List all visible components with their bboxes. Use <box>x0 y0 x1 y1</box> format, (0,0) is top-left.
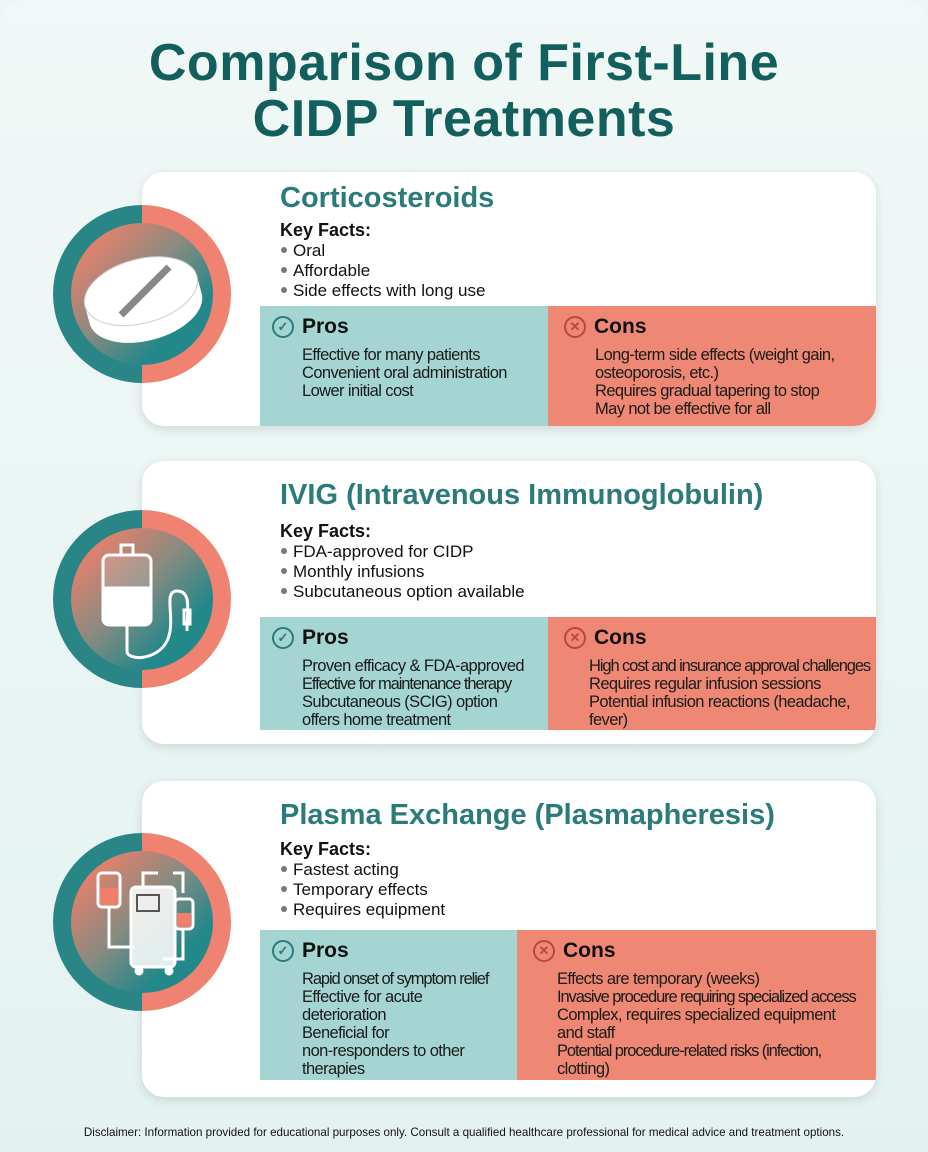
key facts: corticosteroids: Affordable <box>293 261 370 280</box>
cons: IVIG <box>548 617 876 730</box>
cons: corticosteroids <box>548 306 876 426</box>
key facts: plasma exchange: Temporary effects <box>293 880 428 899</box>
pros: IVIG <box>260 617 548 730</box>
pros: corticosteroids <box>260 306 548 426</box>
pros: IVIG: ✓ <box>278 630 288 645</box>
pros: plasma exchange: non-responders to other <box>302 1042 464 1060</box>
heading: plasma exchange: Plasma Exchange (Plasmapheresis) <box>280 799 775 831</box>
pros: corticosteroids: Pros <box>302 315 349 338</box>
pros: corticosteroids: ✓ <box>278 319 288 334</box>
cons: IVIG: fever) <box>589 711 628 729</box>
key facts: corticosteroids: Key Facts: <box>280 220 371 240</box>
pros: plasma exchange <box>260 930 517 1080</box>
cons: IVIG: ✕ <box>570 630 580 645</box>
pros: plasma exchange: Beneficial for <box>302 1024 389 1042</box>
key facts: plasma exchange <box>280 839 445 919</box>
disclaimer: Disclaimer: Information provided for educational purposes only. Consult a qualified healthcare professional for medical advice and treatment options. <box>84 1126 844 1139</box>
key facts: corticosteroids: Oral <box>293 241 325 260</box>
pros: IVIG: Proven efficacy & FDA-approved <box>302 657 524 675</box>
cons: corticosteroids: Long-term side effects (weight gain, <box>595 346 834 364</box>
pros: plasma exchange: Pros <box>302 939 349 962</box>
cons: corticosteroids: Cons <box>594 315 646 338</box>
cons: IVIG: High cost and insurance approval challenges <box>589 657 870 675</box>
heading: corticosteroids: Corticosteroids <box>280 182 494 214</box>
cons: plasma exchange: Complex, requires specialized equipment <box>557 1006 835 1024</box>
icon: IV bag <box>53 510 231 688</box>
cons: IVIG: Cons <box>594 626 646 649</box>
heading: IVIG: IVIG (Intravenous Immunoglobulin) <box>280 479 763 511</box>
key facts: IVIG <box>280 521 525 601</box>
cons: IVIG: Potential infusion reactions (headache, <box>589 693 850 711</box>
key facts: corticosteroids <box>280 220 485 300</box>
pros: plasma exchange: Rapid onset of symptom relief <box>302 970 488 988</box>
cons: IVIG: Requires regular infusion sessions <box>589 675 821 693</box>
pros: plasma exchange: therapies <box>302 1060 364 1078</box>
cons: corticosteroids: osteoporosis, etc.) <box>595 364 718 382</box>
cons: plasma exchange <box>517 930 876 1080</box>
title: CIDP Treatments <box>253 90 675 148</box>
panel: IVIG <box>142 461 876 744</box>
pros: plasma exchange: ✓ <box>278 943 288 958</box>
pros: plasma exchange: Effective for acute <box>302 988 422 1006</box>
pros: corticosteroids: Convenient oral administration <box>302 364 507 382</box>
pros: IVIG: Subcutaneous (SCIG) option <box>302 693 497 711</box>
panel: plasma exchange <box>142 781 876 1097</box>
cons: plasma exchange: Cons <box>563 939 616 962</box>
key facts: IVIG: Subcutaneous option available <box>293 582 525 601</box>
key facts: plasma exchange: Requires equipment <box>293 900 445 919</box>
key facts: IVIG: Monthly infusions <box>293 562 424 581</box>
title: Comparison of First-Line <box>149 34 779 92</box>
cons: plasma exchange: Potential procedure-related risks (infection, <box>557 1042 821 1060</box>
cons: plasma exchange: clotting) <box>557 1060 609 1078</box>
title <box>149 34 779 148</box>
cons: corticosteroids: Requires gradual tapering to stop <box>595 382 819 400</box>
key facts: IVIG: Key Facts: <box>280 521 371 541</box>
pros: IVIG: offers home treatment <box>302 711 451 729</box>
key facts: corticosteroids: Side effects with long use <box>293 281 485 300</box>
panel: corticosteroids <box>142 172 876 426</box>
cons: plasma exchange: ✕ <box>539 943 549 958</box>
cons: plasma exchange: Effects are temporary (weeks) <box>557 970 759 988</box>
cons: corticosteroids: May not be effective for all <box>595 400 770 418</box>
key facts: IVIG: FDA-approved for CIDP <box>293 542 473 561</box>
key facts: plasma exchange: Key Facts: <box>280 839 371 859</box>
cons: plasma exchange: Invasive procedure requiring specialized access <box>557 988 856 1006</box>
pros: corticosteroids: Lower initial cost <box>302 382 413 400</box>
icon: pill <box>53 205 231 383</box>
cons: corticosteroids: ✕ <box>570 319 580 334</box>
pros: corticosteroids: Effective for many patients <box>302 346 480 364</box>
key facts: plasma exchange: Fastest acting <box>293 860 399 879</box>
icon: plasmapheresis machine <box>53 833 231 1011</box>
pros: IVIG: Pros <box>302 626 349 649</box>
cons: plasma exchange: and staff <box>557 1024 615 1042</box>
pros: plasma exchange: deterioration <box>302 1006 386 1024</box>
pros: IVIG: Effective for maintenance therapy <box>302 675 511 693</box>
